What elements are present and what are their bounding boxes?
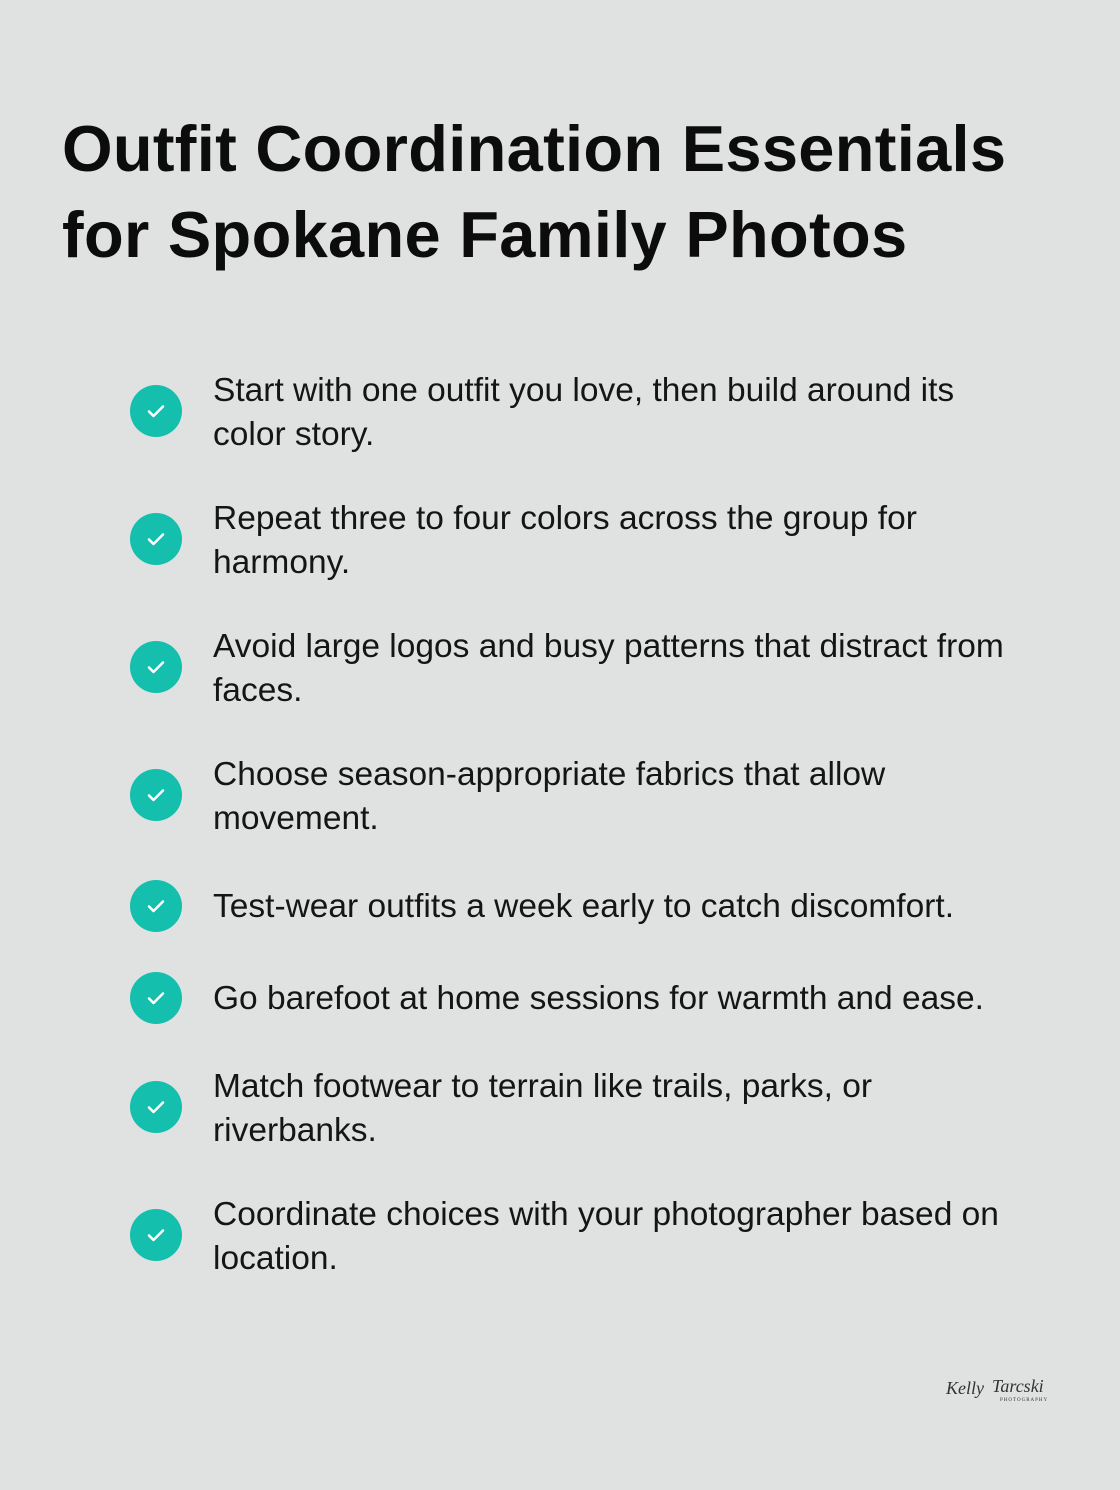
icon: check 2 xyxy=(130,513,182,565)
icon: check 7 xyxy=(130,1081,182,1133)
item 1: color story. xyxy=(213,416,374,453)
title xyxy=(62,112,1006,271)
signature logo xyxy=(946,1376,1048,1403)
item 4: movement. xyxy=(213,800,379,837)
item 4 xyxy=(213,756,886,837)
item 7 xyxy=(213,1068,872,1149)
title: Outfit Coordination Essentials xyxy=(62,112,1006,185)
item 3 xyxy=(213,628,1004,709)
item 7: Match footwear to terrain like trails, parks, or xyxy=(213,1068,872,1105)
item 4: Choose season-appropriate fabrics that allow xyxy=(213,756,885,793)
icon: check 5 xyxy=(130,880,182,932)
signature logo: PHOTOGRAPHY xyxy=(1000,1398,1048,1403)
icon: check 1 xyxy=(130,385,182,437)
item 7: riverbanks. xyxy=(213,1112,377,1149)
icon: check 3 xyxy=(130,641,182,693)
item 1 xyxy=(213,372,954,453)
item 3: Avoid large logos and busy patterns that distract from xyxy=(213,628,1004,665)
signature logo: Kelly xyxy=(946,1378,984,1398)
item 1: Start with one outfit you love, then build around its xyxy=(213,372,954,409)
signature logo: Tarcski xyxy=(992,1376,1044,1396)
item 6: Go barefoot at home sessions for warmth and ease. xyxy=(213,980,984,1017)
item 2: Repeat three to four colors across the group for xyxy=(213,500,917,537)
icon: check 6 xyxy=(130,972,182,1024)
icon: check 8 xyxy=(130,1209,182,1261)
icon: check 4 xyxy=(130,769,182,821)
item 8: Coordinate choices with your photographer based on xyxy=(213,1196,999,1233)
item 8: location. xyxy=(213,1240,338,1277)
title: for Spokane Family Photos xyxy=(62,198,907,271)
item 5: Test-wear outfits a week early to catch discomfort. xyxy=(213,888,954,925)
item 8 xyxy=(213,1196,999,1277)
item 3: faces. xyxy=(213,672,302,709)
list xyxy=(130,372,1004,1277)
item 2 xyxy=(213,500,917,581)
item 2: harmony. xyxy=(213,544,350,581)
